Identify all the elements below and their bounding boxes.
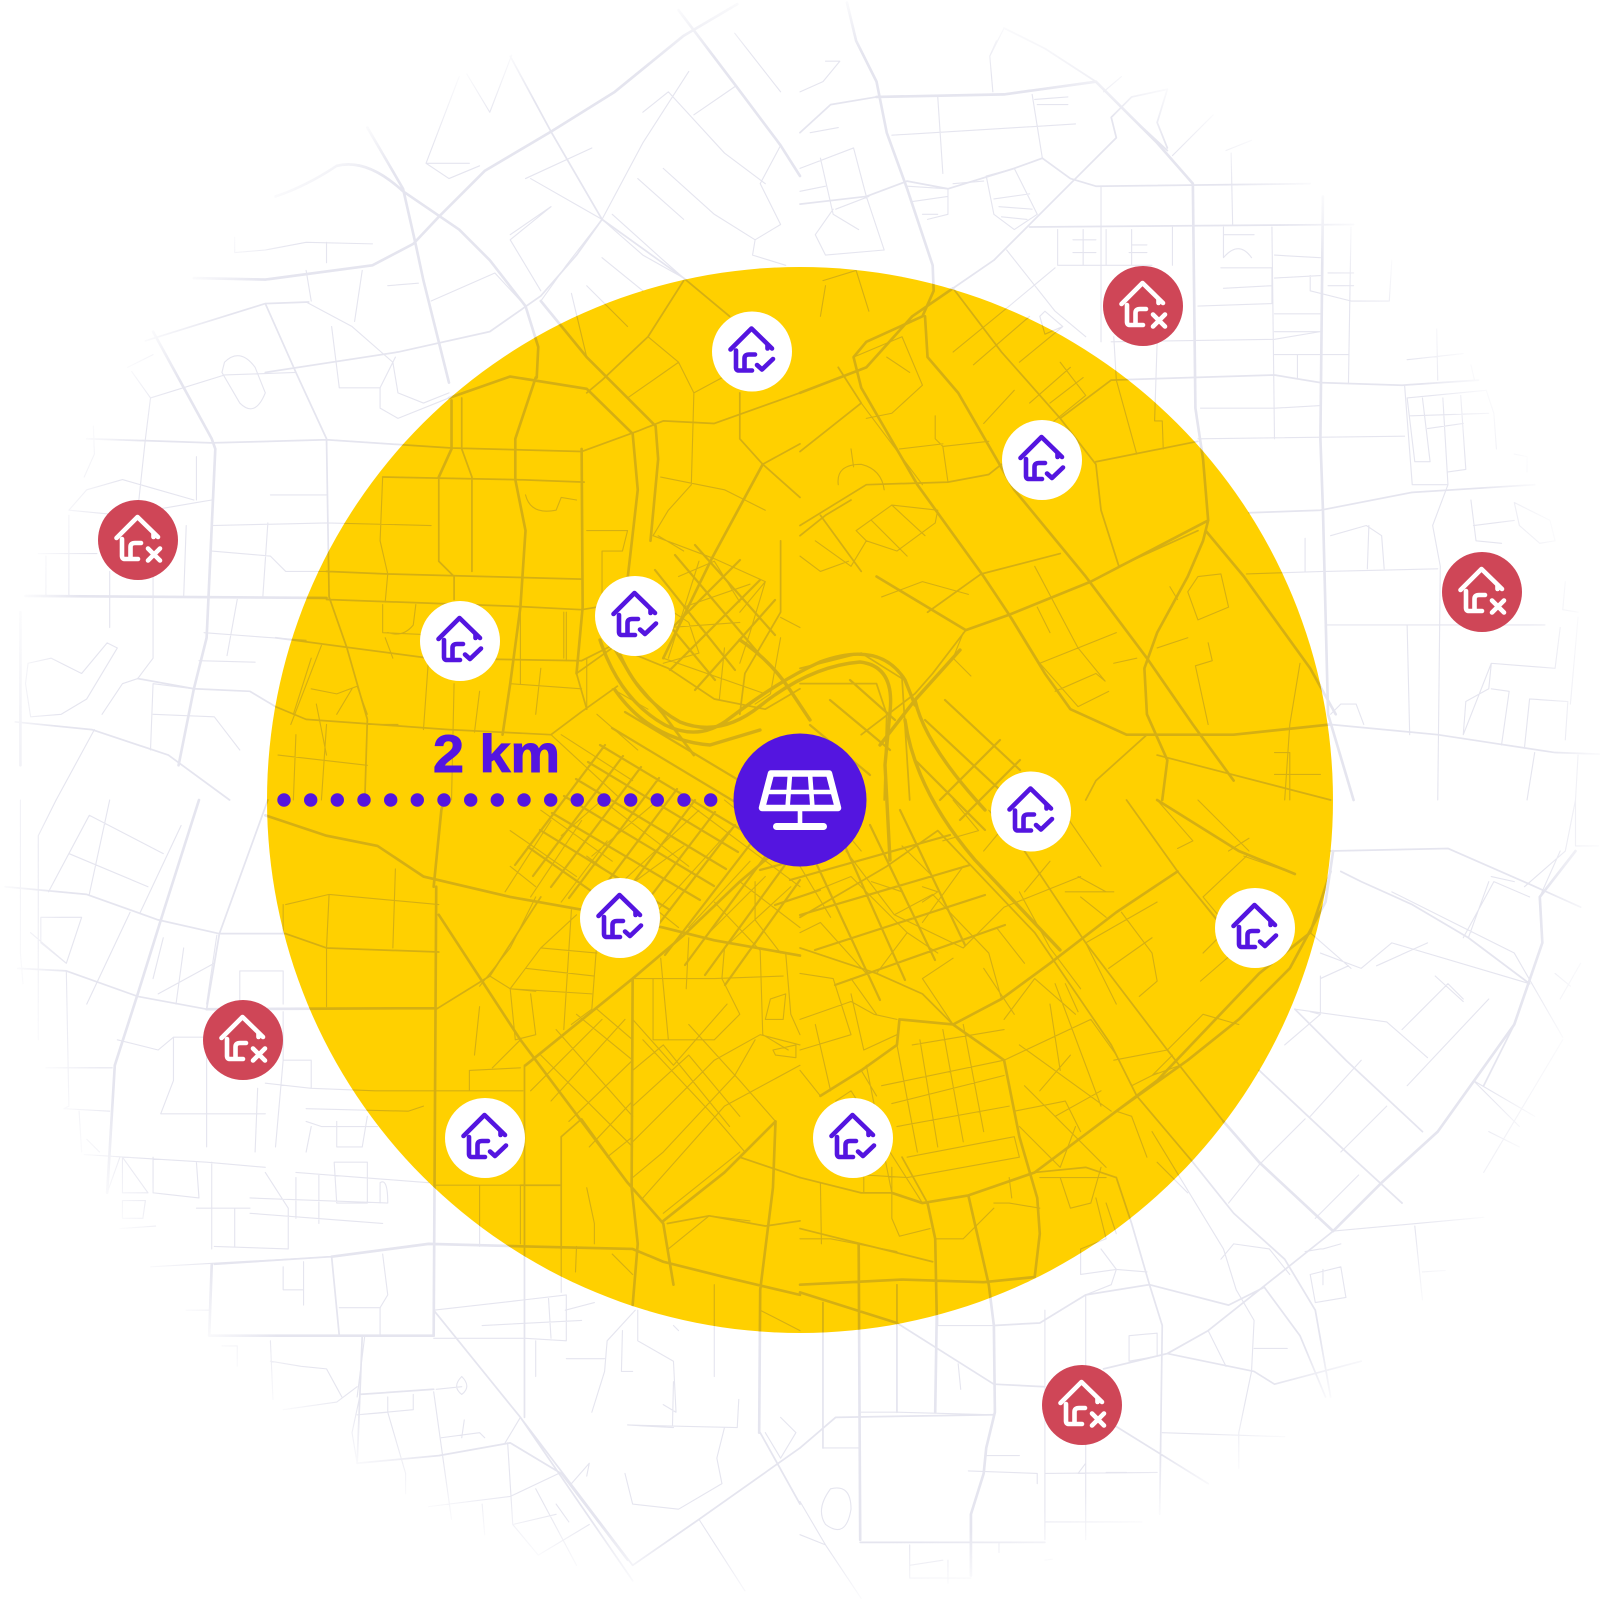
house eligible: upper right [1002,420,1082,500]
house eligible: lower centre [580,878,660,958]
map roads inside service radius [267,267,1332,1332]
icon: solar panel hub [734,734,866,866]
house ineligible: far right [1442,552,1522,632]
dotted radius line [277,793,717,807]
house eligible: upper centre [595,576,675,656]
radius label: 2 km [433,725,560,784]
service area: yellow 2 km circle [267,267,1333,1333]
house eligible: centre right [991,772,1071,852]
house ineligible: bottom right [1042,1365,1122,1445]
house ineligible: lower left [203,1000,283,1080]
house ineligible: top right [1103,266,1183,346]
house eligible: bottom left [445,1098,525,1178]
house eligible: left [420,601,500,681]
house ineligible: far left [98,500,178,580]
house eligible: far right [1215,888,1295,968]
house eligible: top [712,312,792,392]
house eligible: bottom centre [813,1098,893,1178]
